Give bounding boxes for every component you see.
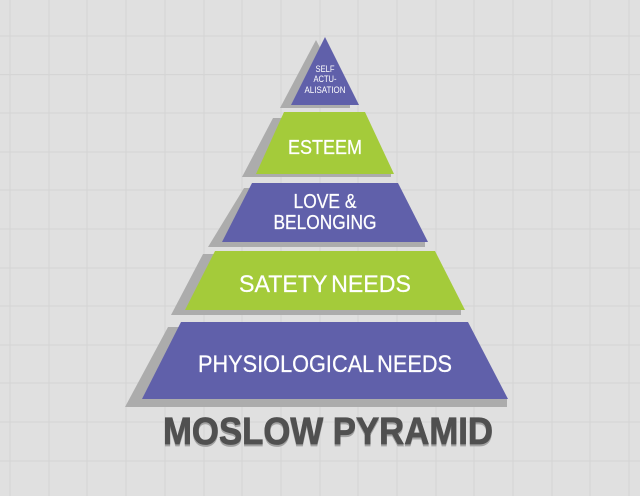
level 2: safety needs [171,251,465,315]
title: MOSLOW PYRAMID [163,411,493,453]
level 4: esteem: ESTEEM [288,137,362,159]
level 3: love and belonging [208,183,428,247]
level 1: physiological needs: PHYSIOLOGICAL NEEDS [198,351,452,378]
level 1: physiological needs [125,322,508,407]
level 3: love and belonging: LOVE & [294,191,357,213]
level 5: self actualisation: ACTU- [314,74,336,84]
level 5: self actualisation [280,37,359,108]
level 3: love and belonging: BELONGING [274,212,376,234]
title: MOSLOW PYRAMID [163,413,493,455]
level 5: self actualisation: SELF [316,64,335,74]
level 4: esteem [242,112,394,177]
level 2: safety needs: SATETY NEEDS [239,271,411,298]
level 5: self actualisation: ALISATION [304,85,346,95]
